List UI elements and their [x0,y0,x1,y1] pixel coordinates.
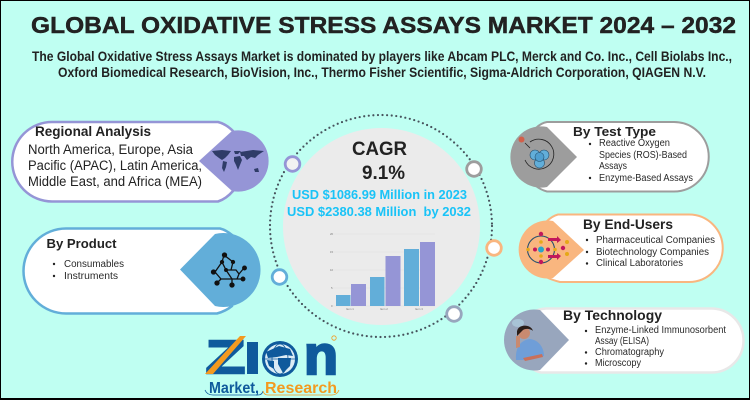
bar chart: 20 [330,232,334,236]
technology list: Chromatography [595,347,664,358]
end-users list [586,235,715,269]
connector node: purple [285,157,300,171]
technology list: Microscopy [595,358,641,369]
heading: by end-users: By End-Users [583,217,673,232]
regional list: Middle East, and Africa (MEA) [28,174,202,189]
bar chart: Item 1 [346,307,354,311]
panel: by product [24,228,261,314]
product list: Consumables [64,259,124,270]
technology list: Assay (ELISA) [595,336,649,347]
regional list [28,142,202,189]
logo globe [262,341,298,377]
heading: by technology: By Technology [563,308,663,323]
product list [53,259,124,282]
end-users list: Clinical Laboratories [596,258,683,269]
logo: Zion Market Research: Market, [209,380,259,397]
bar chart: Item 3 [415,307,423,311]
test type list [589,138,693,184]
panel: by end-users [519,214,723,282]
bar chart: 15 [330,250,334,254]
panel: central CAGR circle [270,115,492,337]
logo: Zion Market Research: Research [265,380,337,397]
panel: by test type [510,122,709,192]
bar chart: 0 [331,304,333,308]
logo: Zion Market Research [205,324,339,397]
heading: by test type: By Test Type [573,124,656,139]
market size figures: USD $1086.99 Million in 2023 [292,187,467,202]
end-users list: Pharmaceutical Companies [596,235,715,246]
bar chart: 10 [330,268,334,272]
heading: by product: By Product [46,236,117,251]
connector node: blue [272,270,287,284]
connector node: slate [447,307,461,321]
title: GLOBAL OXIDATIVE STRESS ASSAYS MARKET 2024 – 2032 [31,12,736,38]
subtitle text block [32,49,732,80]
product list: Instruments [64,271,118,282]
heading: regional analysis: Regional Analysis [35,124,151,139]
test type list: Species (ROS)-Based [599,150,687,161]
CAGR value: CAGR [352,139,407,160]
technology list [585,325,726,369]
test type list: Enzyme-Based Assays [599,173,693,184]
bar chart [330,232,435,311]
bar chart: 5 [331,286,333,290]
icon: thinking person [512,319,544,361]
technology list: Enzyme-Linked Immunosorbent [595,325,726,336]
test type list: Reactive Oxygen [599,138,670,149]
connector node: orange [487,241,501,255]
test type list: Assays [599,161,627,172]
logo: Zion Market Research: n [304,324,338,386]
end-users list: Biotechnology Companies [596,247,709,258]
market size figures: USD $2380.38 Million by 2032 [287,204,471,219]
panel: regional analysis [12,122,269,202]
regional list: North America, Europe, Asia [28,142,193,157]
CAGR value [352,139,407,184]
bar chart: Item 2 [380,307,388,311]
logo: Zion Market Research: Z [206,331,245,383]
icon: cell pathway [526,232,569,264]
connector node: grey [467,162,481,176]
icon: molecule [212,253,246,287]
icon: reactive oxygen atom [518,136,554,169]
regional list: Pacific (APAC), Latin America, [28,158,202,173]
CAGR value: 9.1% [362,163,405,184]
panel: by technology [504,308,744,372]
market size figures [287,187,471,219]
icon: world map [212,150,264,172]
